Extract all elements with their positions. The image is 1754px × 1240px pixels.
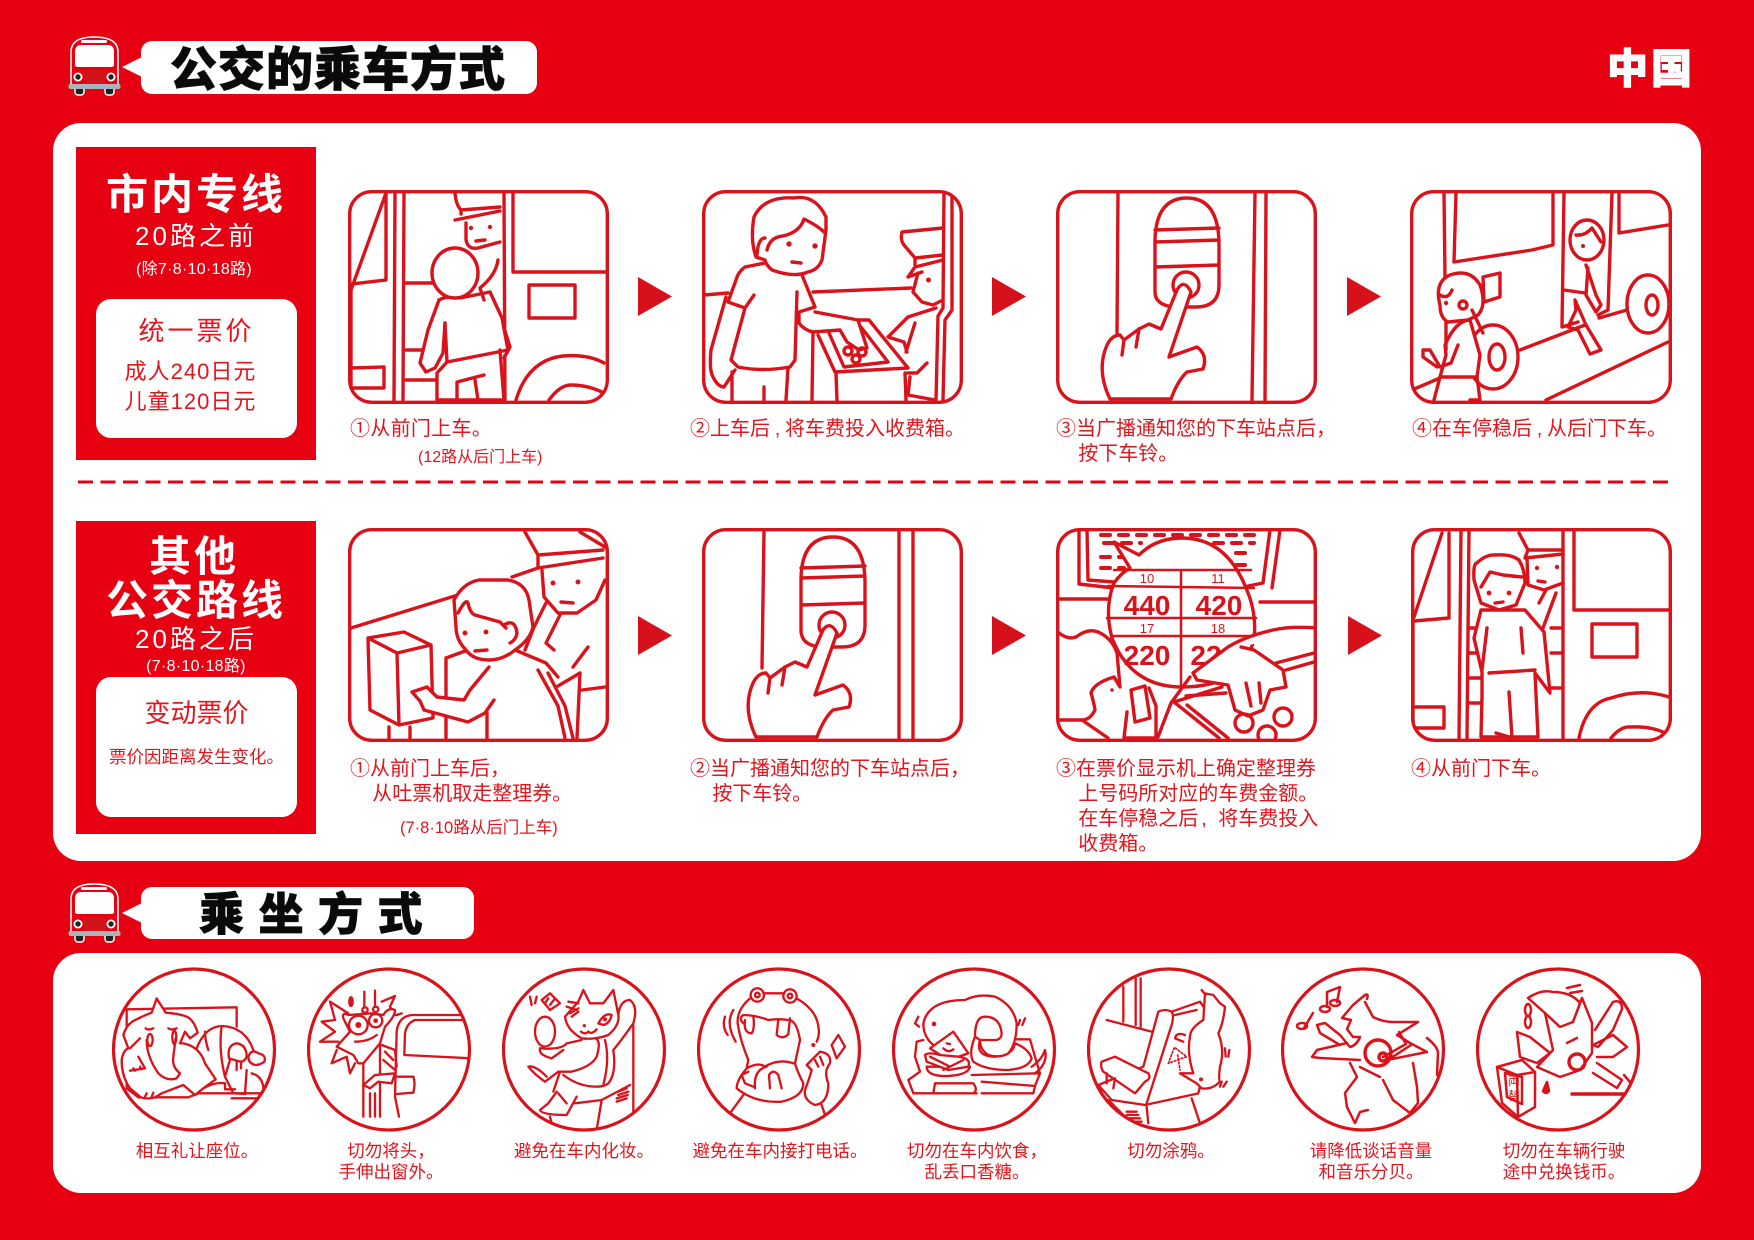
panel: boarding steps: [53, 123, 1701, 861]
caption: step 3: [1056, 418, 1336, 465]
illustration: fare display: 11: [1211, 571, 1225, 586]
illustration: fare display: 440: [1124, 590, 1170, 621]
speech tail: [122, 904, 141, 922]
icon: elephant gives up seat: [112, 967, 276, 1132]
caption: no eating: 乱丢口香糖。: [924, 1162, 1030, 1182]
caption: lower volume: 请降低谈话音量: [1310, 1141, 1432, 1161]
caption: step 3: 在车停稳之后 将车费投入: [1078, 808, 1318, 830]
caption: step 1: ①从前门上车。: [350, 418, 492, 440]
caption: step 1: 从吐票机取走整理券。: [372, 783, 572, 805]
caption: keep head in: [338, 1141, 444, 1182]
illustration: press bell: [702, 528, 963, 742]
caption: step 4: ,: [1537, 418, 1542, 440]
caption: step 3: ③在票价显示机上确定整理券: [1056, 758, 1316, 780]
caption: step 2: ②当广播通知您的下车站点后，: [690, 758, 970, 780]
caption: no money change: [1503, 1141, 1625, 1182]
caption: no eating: 切勿在车内饮食，: [907, 1141, 1047, 1161]
illustration: fare display: 22: [1190, 640, 1222, 671]
illustration: fare display: [1056, 528, 1317, 742]
illustration: pay fare into box: [702, 190, 963, 404]
note: routes 7 8 10: (7·8·10路从后门上车): [400, 819, 558, 837]
caption: no graffiti: 切勿涂鸦。: [1127, 1141, 1215, 1161]
fare title: 统一票价: [138, 316, 254, 346]
caption: step 2: [690, 758, 970, 805]
icon: cat puts on makeup: [502, 967, 666, 1132]
illustration: board at front door: [348, 190, 609, 404]
caption: step 2: ②上车后 将车费投入收费箱。: [690, 418, 965, 440]
icon: dragon leans out window: [307, 967, 472, 1132]
speech tail: [122, 58, 141, 76]
arrow: [638, 616, 672, 655]
note: route 12: (12路从后门上车): [418, 449, 542, 466]
illustration: fare display: 420: [1196, 590, 1242, 621]
caption: lower volume: 和音乐分贝。: [1318, 1162, 1424, 1182]
header: riding manners: [68, 883, 474, 943]
illustration: get off rear door: [1410, 190, 1672, 404]
icon: monkey graffiti: [1087, 967, 1252, 1132]
illustration: take ticket: [348, 528, 609, 742]
heading: city line: 市内专线: [106, 171, 286, 218]
caption: step 3: 上号码所对应的车费金额。: [1078, 783, 1318, 805]
icon: fox at money changer: 替: [1508, 1089, 1520, 1103]
arrow: [992, 616, 1026, 655]
caption: keep head in: 切勿将头，: [347, 1141, 435, 1161]
icon: fox at money changer: [1476, 967, 1640, 1132]
caption: lower volume: [1310, 1141, 1432, 1182]
icon: wolf with loud music: [1281, 967, 1446, 1132]
fare box: [96, 677, 297, 817]
caption: step 2: ,: [775, 418, 780, 440]
caption: step 3: [1056, 758, 1318, 855]
illustration: fare display: 10: [1140, 571, 1154, 586]
caption: step 3: ,: [1201, 808, 1207, 830]
title pill: [141, 41, 537, 94]
header: bus icon and title: [68, 36, 537, 96]
caption: keep head in: 手伸出窗外。: [338, 1162, 444, 1182]
fare title: 变动票价: [144, 698, 248, 728]
fare box: [96, 299, 297, 438]
icon: fox at money changer: 両: [1508, 1074, 1520, 1088]
caption: no money change: 切勿在车辆行驶: [1503, 1141, 1625, 1161]
heading: riding manners: 乘坐方式: [199, 889, 437, 940]
route range: 20路之前: [135, 221, 257, 251]
heading: country: 中国: [1607, 46, 1695, 92]
heading: bus routes: 公交路线: [106, 577, 286, 624]
caption: step 1: [350, 758, 572, 805]
illustration: fare display: 220: [1124, 640, 1170, 671]
title pill: [141, 887, 474, 939]
illustration: press bell: [1056, 190, 1317, 404]
heading: bus boarding method: 公交的乘车方式: [170, 43, 506, 96]
route range: 20路之后: [135, 624, 257, 654]
illustration: exit front door: [1411, 528, 1672, 742]
caption: step 3: ③当广播通知您的下车站点后，: [1056, 418, 1336, 440]
adult fare: 成人240日元: [125, 359, 256, 384]
icon: hippo on the phone: [697, 967, 862, 1132]
fare note: 票价因距离发生变化。: [109, 747, 284, 767]
caption: step 3: 收费箱。: [1078, 833, 1158, 855]
caption: no calls: 避免在车内接打电话。: [692, 1141, 868, 1161]
caption: no money change: 途中兑换钱币。: [1503, 1162, 1625, 1182]
caption: no eating: [907, 1141, 1047, 1182]
caption: yield seats: 相互礼让座位。: [136, 1141, 258, 1161]
caption: step 4: ④在车停稳后 从后门下车。: [1412, 418, 1667, 440]
heading: other: 其他: [149, 533, 239, 580]
illustration: fare display: 18: [1211, 621, 1225, 636]
panel: manners: [53, 953, 1701, 1193]
panel: city routes: [76, 147, 316, 460]
caption: step 3: 按下车铃。: [1078, 443, 1178, 465]
divider: [78, 480, 1668, 484]
icon: bus: [68, 883, 120, 943]
arrow: [638, 277, 672, 316]
arrow: [992, 277, 1026, 316]
route exception: (除7·8·10·18路): [136, 261, 252, 278]
icon: bus: [68, 36, 120, 96]
illustration: fare display: 17: [1140, 621, 1154, 636]
caption: no makeup: 避免在车内化妆。: [514, 1141, 654, 1161]
caption: step 4: ④从前门下车。: [1411, 758, 1551, 780]
child fare: 儿童120日元: [125, 389, 256, 414]
caption: step 1: ①从前门上车后，: [350, 758, 510, 780]
arrow: [1347, 277, 1381, 316]
arrow: [1348, 616, 1382, 655]
caption: step 2: 按下车铃。: [712, 783, 812, 805]
route list: (7·8·10·18路): [146, 658, 246, 675]
icon: elephant eating: [892, 967, 1056, 1132]
panel: other routes: [76, 521, 316, 834]
